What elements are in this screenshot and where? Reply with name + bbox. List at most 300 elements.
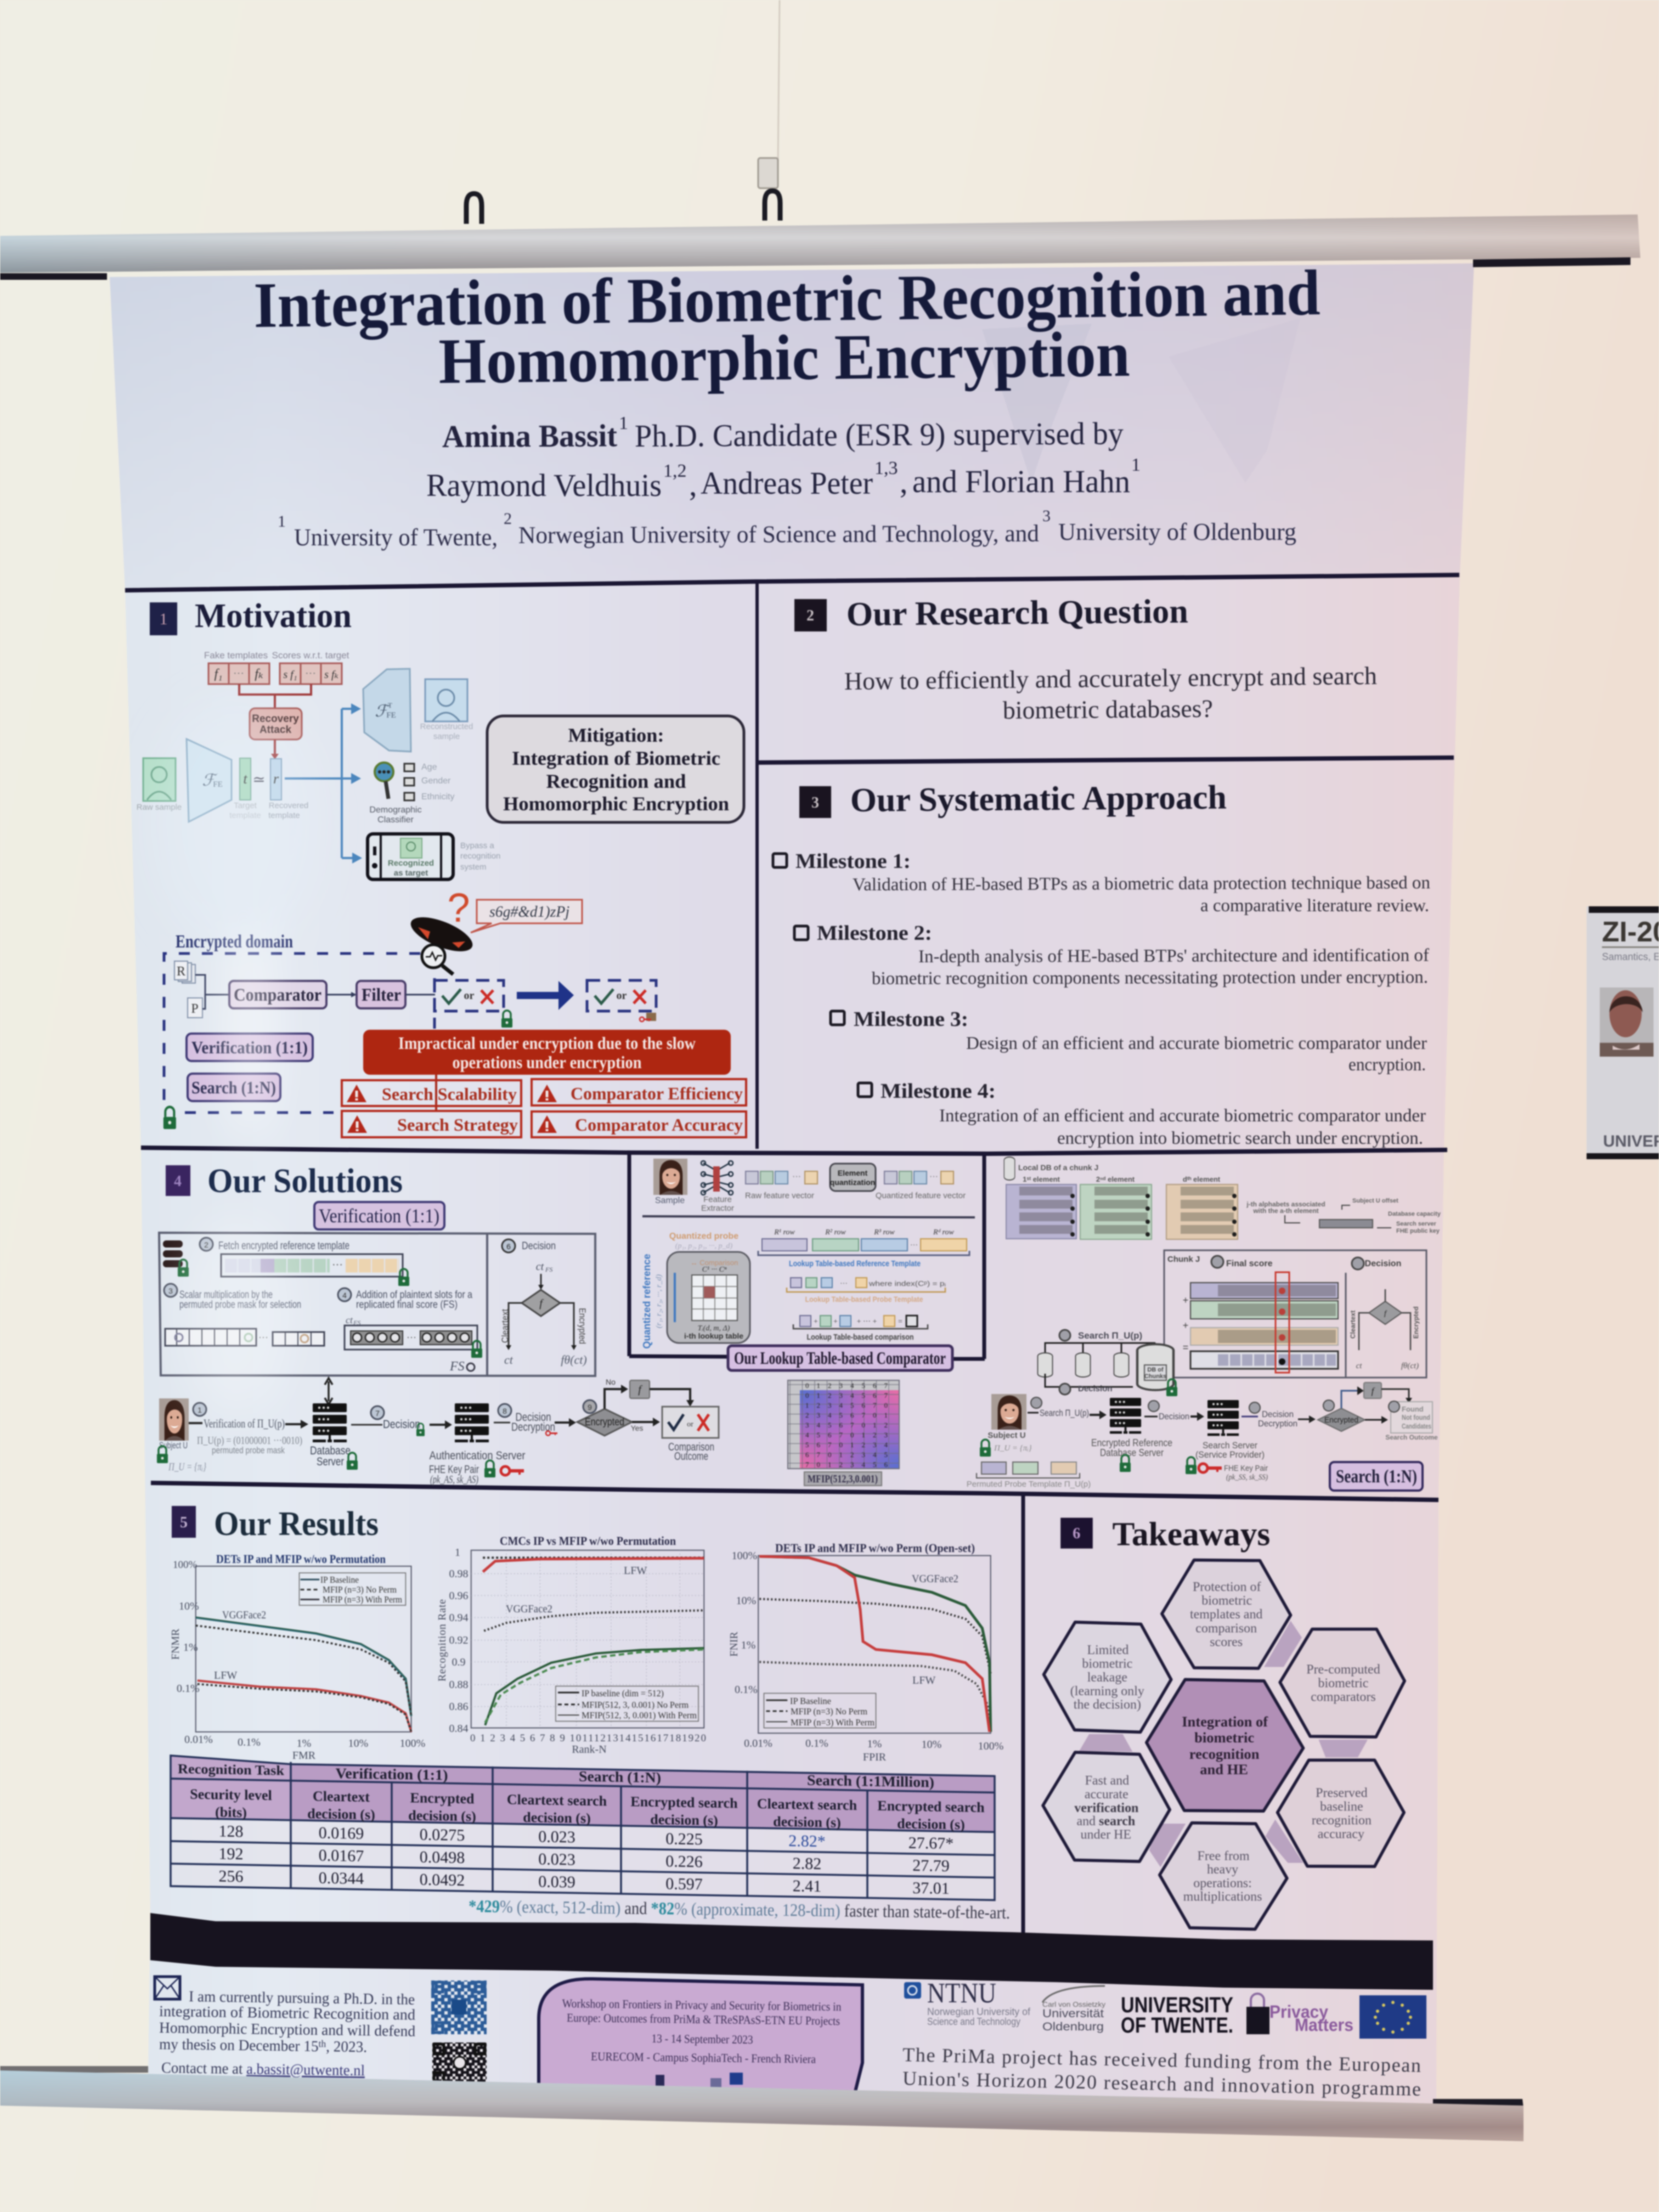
table row: 256 bits: 0.0492 — [420, 1871, 465, 1889]
recovery attack diagram: ℱ — [375, 702, 391, 720]
milestone 3: Milestone 3: — [854, 1008, 968, 1031]
search server: (Service Provider) — [1195, 1449, 1265, 1460]
panel: motivation — [137, 597, 746, 1137]
chart: DET open-set: DETs IP and MFIP w/wo Perm (Open-set) — [775, 1541, 975, 1555]
takeaway labels: multiplications — [1183, 1889, 1262, 1904]
milestone 2 — [794, 922, 1429, 989]
table header row: Search (1:N) — [579, 1768, 661, 1786]
chart: DET open-set: 0.01% — [744, 1737, 772, 1750]
icon: envelope — [155, 1977, 180, 1999]
step 2: fetch template: 2 — [204, 1240, 208, 1249]
chart: DET open-set: 100% — [732, 1550, 757, 1562]
element explanation diagram — [1246, 1198, 1441, 1234]
challenge: search strategy: Search Strategy — [397, 1115, 518, 1135]
hexagon: pre-computed comparators — [1280, 1629, 1404, 1737]
authors: 1 — [619, 413, 628, 433]
lookup table-based reference template: R¹ row — [774, 1228, 795, 1237]
decision to authentication server — [351, 1406, 452, 1436]
recovery attack diagram: system — [460, 862, 487, 872]
chart: DET open-set — [728, 1541, 1003, 1763]
chart: DET open-set: 0.1% — [735, 1684, 758, 1696]
chunks database: Chunks — [1144, 1373, 1166, 1380]
table header row: decision (s) — [650, 1812, 718, 1829]
takeaway labels: accuracy — [1318, 1827, 1364, 1842]
chunk J panel: + — [1183, 1295, 1188, 1306]
chunk J panel: f — [1384, 1310, 1387, 1318]
heading: our solutions: Our Solutions — [207, 1163, 403, 1200]
takeaway labels: Preserved — [1316, 1786, 1368, 1801]
label: verification request — [189, 1417, 308, 1455]
logo: University of Oldenburg: Universität — [1042, 2007, 1104, 2020]
quantized feature vector: Quantized feature vector — [876, 1191, 966, 1200]
decision decryption in search: Decision — [1262, 1410, 1294, 1419]
chunk J panel: + — [1183, 1320, 1188, 1331]
logo: NTNU: NTNU — [927, 1978, 996, 2009]
funding acknowledgment: The PriMa project has received funding from the European — [902, 2044, 1421, 2076]
logo: University of Twente: OF TWENTE. — [1121, 2013, 1233, 2038]
chart: DET verification — [170, 1552, 425, 1762]
portrait photo on sign — [1600, 988, 1654, 1057]
takeaway labels: Fast and — [1085, 1774, 1129, 1788]
takeaway labels: scores — [1210, 1635, 1243, 1650]
chart: DET verification: 10% — [348, 1737, 368, 1750]
takeaway labels: Limited — [1087, 1643, 1128, 1657]
decision decryption step: Decision — [516, 1411, 551, 1424]
decision box decrypted — [587, 980, 656, 1022]
search outcome — [1385, 1401, 1438, 1441]
chart: DET open-set: 100% — [978, 1740, 1003, 1752]
recovery attack diagram: Ethnicity — [421, 792, 454, 802]
chart: DET verification: 10% — [179, 1600, 199, 1612]
authors: 1,3 — [874, 458, 898, 478]
table header row: decision (s) — [307, 1805, 375, 1822]
chunk J panel — [1164, 1250, 1426, 1378]
heatmap: MFIP table: 23456701 — [805, 1411, 895, 1419]
workshop box: EURECOM - Campus SophiaTech - French Riviera — [591, 2049, 816, 2066]
takeaway labels: heavy — [1207, 1863, 1238, 1877]
logo: University of Oldenburg — [1042, 1986, 1106, 2033]
raw feature vector: ··· — [792, 1172, 801, 1182]
recovery attack diagram — [137, 650, 500, 879]
search server: FHE Key Pair — [1224, 1464, 1268, 1473]
contact text: th — [318, 2038, 326, 2049]
element explanation diagram: Database capacity — [1388, 1211, 1441, 1217]
chart: CMC identification: VGGFace2 — [506, 1603, 552, 1615]
comparator box — [229, 981, 326, 1008]
chart: DET verification: 1% — [297, 1737, 311, 1750]
takeaway labels: Free from — [1198, 1849, 1250, 1864]
chart: DET open-set: FPIR — [863, 1751, 887, 1763]
table row: 256 bits: 0.0344 — [319, 1869, 364, 1888]
step 6: decision: ct — [504, 1353, 514, 1367]
milestone 3 — [831, 1008, 1427, 1075]
search outcome: Not found — [1402, 1413, 1430, 1421]
heatmap: MFIP table: 45670123 — [805, 1431, 895, 1439]
section frame lines — [125, 575, 1459, 1934]
chart: CMC identification: 1 — [455, 1547, 460, 1559]
recovery attack diagram: f₁ — [214, 667, 223, 681]
decision decryption in search: Decryption — [1258, 1419, 1297, 1429]
chunk J panel: Chunk J — [1167, 1255, 1200, 1264]
local database of a chunk: 2ⁿᵈ element — [1096, 1175, 1135, 1183]
tag: search — [188, 1074, 280, 1101]
chunk J panel: fθ(ct) — [1401, 1362, 1419, 1370]
chunk J panel: ct — [1356, 1362, 1362, 1370]
recovery attack diagram: ··· — [233, 668, 244, 680]
search request arrow — [1028, 1397, 1107, 1419]
heatmap: MFIP table: MFIP(512,3,0.001) — [808, 1473, 878, 1485]
heatmap: MFIP table: 01234567 — [805, 1381, 895, 1390]
heading: motivation: 1 — [159, 610, 168, 628]
heatmap: MFIP table: 34567012 — [805, 1421, 895, 1429]
lookup table grid — [641, 1232, 750, 1349]
chart: DET verification: 0.01% — [184, 1734, 213, 1746]
lookup table-based comparison — [793, 1316, 928, 1342]
recovery attack diagram: template — [268, 811, 300, 820]
table header row: (bits) — [215, 1804, 247, 1820]
authentication server: FHE Key Pair — [429, 1464, 479, 1476]
database server: Database — [310, 1444, 351, 1457]
takeaway labels: Pre-computed — [1306, 1663, 1380, 1677]
attacker icon with speech bubble: ? — [447, 885, 470, 930]
challenge boxes — [342, 1079, 746, 1137]
lookup table-based comparison: + ··· + — [857, 1318, 877, 1326]
step 6: decision: Encrypted — [577, 1308, 588, 1344]
decision to authentication server: Decision — [383, 1418, 420, 1431]
step 4: addition of plaintext slots: 4 — [342, 1291, 347, 1300]
raw feature vector: Raw feature vector — [745, 1191, 814, 1200]
panel: search 1:N workflow — [967, 1157, 1441, 1491]
takeaway labels: biometric — [1201, 1594, 1252, 1608]
affiliations — [278, 507, 1296, 551]
lookup table-based reference template: R² row — [825, 1228, 846, 1237]
tag: verification: Verification (1:1) — [191, 1037, 308, 1057]
takeaway labels: leakage — [1087, 1671, 1127, 1685]
comparison outcome: Comparison — [668, 1441, 714, 1453]
lookup table-based comparison: = — [898, 1318, 902, 1326]
authentication server: (pk_AS, sk_AS) — [430, 1474, 478, 1486]
hexagon: fast and accurate — [1043, 1752, 1170, 1861]
milestone 4: encryption into biometric search under encryption. — [1057, 1128, 1423, 1148]
heading: our results: Our Results — [214, 1505, 379, 1543]
encrypted decision diamond: f — [638, 1384, 642, 1396]
database server: Server — [317, 1455, 344, 1468]
affiliations: Norwegian University of Science and Technology, and — [518, 520, 1039, 549]
sample photo — [653, 1159, 687, 1205]
heading: our solutions: 4 — [174, 1173, 182, 1190]
decision box encrypted: or — [464, 990, 475, 1002]
chart: DET verification: MFIP (n=3) With Perm — [323, 1594, 402, 1605]
takeaway labels: the decision) — [1074, 1697, 1141, 1712]
chart: DET verification: 100% — [400, 1737, 425, 1750]
takeaway labels: biometric — [1194, 1729, 1254, 1746]
chart: DET open-set: 1% — [867, 1738, 882, 1750]
table header row: Security level — [190, 1786, 272, 1803]
table row: 128 bits: 0.0275 — [420, 1826, 465, 1844]
step 6: decision: Decision — [522, 1240, 556, 1252]
encrypted database icon — [163, 1240, 189, 1277]
raw feature vector — [745, 1171, 817, 1200]
bottom mounting rod — [0, 2066, 1523, 2141]
takeaway labels: recognition — [1189, 1746, 1260, 1762]
step 3: scalar multiplication: Scalar multiplication by the — [179, 1289, 273, 1301]
chart: DET verification: IP Baseline — [320, 1575, 359, 1585]
chart: DET verification: FMR — [292, 1750, 316, 1762]
logo: Privacy Matters: Matters — [1295, 2015, 1353, 2035]
local database of a chunk — [1004, 1157, 1238, 1239]
search pipeline — [967, 1383, 1438, 1491]
table row: 256 bits: 37.01 — [912, 1879, 950, 1898]
table row: 192 bits: 0.0167 — [319, 1847, 364, 1865]
search outcome: Found — [1402, 1405, 1424, 1413]
callout: mitigation: Integration of Biometric — [512, 747, 720, 769]
chart: DET verification: 100% — [173, 1559, 198, 1571]
search server — [1186, 1400, 1268, 1482]
milestone 2: In-depth analysis of HE-based BTPs' architecture and identification of — [918, 946, 1429, 967]
lookup table grid: ↔ Comparison — [691, 1259, 738, 1267]
recovery attack diagram: fₖ — [255, 667, 263, 681]
step 6: decision: fθ(ct) — [561, 1353, 587, 1367]
heatmap: MFIP table: 56701234 — [805, 1441, 895, 1449]
chart: CMC identification: Rank-N — [572, 1743, 607, 1756]
lookup table-based comparison: + — [814, 1318, 818, 1326]
search request arrow: Search Π_U(p) — [1040, 1408, 1089, 1418]
step 4: addition of plaintext slots: replicated final score (FS) — [356, 1299, 458, 1311]
recovery attack diagram: Gender — [421, 776, 451, 786]
table header row — [178, 1761, 985, 1833]
comparison outcome: Outcome — [674, 1451, 708, 1463]
milestone 1: Milestone 1: — [795, 850, 911, 873]
takeaway labels: under HE — [1081, 1828, 1131, 1842]
milestone 3: encryption. — [1348, 1055, 1426, 1075]
heading: takeaways: 6 — [1073, 1525, 1080, 1542]
table row: 192 bits: 192 — [219, 1844, 243, 1863]
callout: impractical under encryption: Impractical under encryption due to the slow — [398, 1033, 696, 1053]
logo: NTNU — [904, 1978, 1031, 2027]
affiliations: University of Oldenburg — [1058, 518, 1296, 545]
chunk J panel: = — [1183, 1342, 1188, 1353]
lookup table-based comparison: Lookup Table-based comparison — [806, 1333, 914, 1342]
contact text: , 2023. — [326, 2038, 367, 2056]
step 6: decision: FS — [545, 1266, 552, 1273]
chart: DET open-set: MFIP (n=3) With Perm — [791, 1717, 874, 1728]
chart: DET open-set: MFIP (n=3) No Perm — [791, 1706, 867, 1717]
logo: NTNU: Norwegian University of — [927, 2006, 1031, 2017]
recovery attack diagram: Classifier — [377, 815, 414, 825]
authors: Raymond Veldhuis — [426, 467, 662, 503]
recovery attack diagram: template — [229, 811, 261, 820]
table header row: Encrypted search — [630, 1793, 738, 1812]
chart: DET open-set: 10% — [922, 1739, 941, 1751]
authors: 1,2 — [663, 461, 687, 481]
decision to search server — [1144, 1401, 1204, 1421]
table row: 192 bits: 0.0498 — [420, 1848, 465, 1867]
step 3: scalar multiplication: 3 — [168, 1286, 173, 1295]
heading: research question: 2 — [806, 607, 814, 624]
chart: CMC identification: 0.88 — [449, 1679, 469, 1691]
table header row: decision (s) — [897, 1815, 965, 1833]
feature extractor icon — [701, 1161, 734, 1213]
heading: takeaways: Takeaways — [1113, 1516, 1270, 1553]
workshop box: Workshop on Frontiers in Privacy and Security for Biometrics in — [562, 1996, 842, 2013]
hexagon: integration center — [1147, 1679, 1304, 1811]
recovery attack diagram: FE — [386, 711, 396, 720]
takeaway labels: biometric — [1318, 1677, 1368, 1691]
panel: takeaways — [1043, 1516, 1404, 1929]
database server — [310, 1403, 358, 1470]
table header row: Encrypted — [410, 1790, 475, 1807]
milestone 1: a comparative literature review. — [1200, 896, 1429, 916]
step 2: fetch template: ··· — [332, 1259, 343, 1271]
title — [253, 257, 1321, 397]
recovery attack diagram: sample — [433, 732, 460, 741]
table header row: decision (s) — [523, 1809, 591, 1826]
encrypted decision diamond: Encrypted — [585, 1417, 624, 1428]
milestone 4: Milestone 4: — [881, 1080, 996, 1103]
table row: 192 bits: 2.82 — [793, 1854, 821, 1873]
chunks database: Search Π_U(p) — [1078, 1330, 1142, 1341]
table row: 192 bits: 0.023 — [538, 1850, 575, 1869]
takeaway labels: recognition — [1312, 1814, 1372, 1828]
recovery attack diagram: ≃ — [252, 771, 266, 788]
heading: systematic approach: Our Systematic Approach — [850, 779, 1227, 819]
subject U in search: Subject U — [988, 1431, 1026, 1440]
table row: 192 bits: 0.226 — [665, 1852, 703, 1871]
challenge: comparator accuracy — [532, 1111, 746, 1137]
element quantization box: quantization — [830, 1178, 875, 1187]
chart: CMC identification: 0.96 — [449, 1590, 469, 1602]
title: Integration of Biometric Recognition and — [253, 257, 1321, 341]
table row: 256 bits: 2.41 — [793, 1877, 821, 1895]
chart: CMC identification: CMCs IP vs MFIP w/wo Permutation — [500, 1534, 676, 1548]
footnote: speed improvement: *429% (exact, 512-dim) and *82% (approximate, 128-dim) faster than state-of-the-art. — [469, 1896, 1010, 1922]
local database of a chunk: Local DB of a chunk J — [1018, 1163, 1098, 1172]
authentication server — [429, 1403, 526, 1486]
chunk J panel: Final score — [1226, 1259, 1273, 1268]
quantized feature vector: ··· — [929, 1172, 938, 1182]
step 6: decision — [500, 1239, 588, 1367]
takeaway labels: verification — [1074, 1801, 1138, 1815]
takeaway labels — [1070, 1580, 1380, 1904]
local database of a chunk: dᵗʰ element — [1183, 1175, 1221, 1183]
recovery attack diagram: recognition — [460, 851, 500, 861]
step 3: scalar multiplication: permuted probe mask for selection — [179, 1299, 301, 1311]
recovery attack diagram: Age — [421, 763, 437, 772]
chart: DET verification: LFW — [214, 1669, 237, 1681]
tag: our lookup table-based comparator — [728, 1346, 952, 1370]
heading: systematic approach: 3 — [811, 794, 819, 811]
lookup table-based comparison: + — [833, 1318, 838, 1326]
sample photo: Sample — [655, 1196, 685, 1205]
chart: CMC identification: 0.98 — [449, 1568, 469, 1580]
hexagon: protection — [1162, 1560, 1291, 1668]
encrypted decision diamond: No — [606, 1378, 616, 1386]
milestone 2: biometric recognition components necessitating protection under encryption. — [872, 967, 1428, 989]
takeaway labels: baseline — [1320, 1800, 1363, 1814]
chart: CMC identification: LFW — [624, 1565, 647, 1577]
milestone 3: Design of an efficient and accurate biometric comparator under — [966, 1034, 1427, 1053]
table header row: Encrypted search — [877, 1798, 985, 1815]
table header row: Cleartext — [313, 1788, 370, 1805]
recovery attack diagram: ··· — [305, 668, 316, 680]
comparator box: Comparator — [234, 985, 321, 1005]
chart: DET open-set: 10% — [736, 1595, 756, 1607]
lookup table-based probe template — [787, 1278, 946, 1304]
tag: verification — [187, 1034, 313, 1061]
callout: mitigation: Homomorphic Encryption — [503, 793, 729, 815]
label: verification request: Π_U(p) = (01000001 ···0010) — [197, 1435, 302, 1447]
door name sign at right — [1587, 906, 1659, 1159]
milestone 1 — [773, 850, 1430, 916]
recovery attack diagram: Recognized — [388, 859, 434, 868]
milestone 1: Validation of HE-based BTPs as a biometric data protection technique based on — [853, 873, 1430, 895]
chart: CMC identification: 0.9 — [452, 1656, 465, 1668]
label: verification request: Verification of Π_U(p) — [204, 1417, 285, 1430]
chart: CMC identification: MFIP(512, 3, 0.001) No Perm — [582, 1700, 689, 1710]
poster sheet — [110, 263, 1474, 2107]
attacker icon with speech bubble — [407, 885, 582, 974]
chart: CMC identification: 0.86 — [449, 1701, 469, 1713]
heatmap: MFIP table: 67012345 — [805, 1451, 895, 1459]
takeaway labels: operations: — [1193, 1876, 1252, 1891]
panel: our results — [170, 1505, 1010, 1922]
recovery attack diagram: s fₖ — [324, 669, 338, 681]
recovery attack diagram: Scores w.r.t. target — [272, 650, 349, 661]
comparison outcome — [662, 1407, 719, 1463]
recovery attack diagram: Fake templates — [204, 650, 268, 661]
tag: search: Search (1:N) — [191, 1077, 276, 1097]
search outcome: Candidates — [1402, 1422, 1431, 1430]
step 2: fetch template — [200, 1238, 409, 1286]
milestone 4 — [858, 1080, 1426, 1148]
table row: 256 bits: 0.597 — [665, 1875, 703, 1893]
lookup table-based reference template: Lookup Table-based Reference Template — [789, 1259, 921, 1268]
chart: CMC identification: 0.94 — [449, 1612, 469, 1624]
chart: DET open-set: FNIR — [728, 1632, 740, 1657]
heatmap: MFIP table: 12345670 — [805, 1401, 895, 1409]
table row: 128 bits: 128 — [219, 1822, 243, 1841]
affiliations: 3 — [1042, 507, 1051, 525]
encrypted decision diamond: Yes — [631, 1424, 643, 1432]
contact text: integration of Biometric Recognition and — [159, 2003, 415, 2024]
step 4: addition of plaintext slots: ct — [346, 1314, 353, 1325]
step 2: fetch template: Fetch encrypted reference template — [218, 1240, 349, 1252]
encrypted reference database server — [1091, 1398, 1172, 1472]
table row: 128 bits: 0.225 — [665, 1830, 703, 1848]
lookup table grid: i-th lookup table — [684, 1331, 743, 1340]
encrypted domain flow: R — [177, 964, 185, 979]
table header row: Cleartext search — [757, 1796, 857, 1813]
table row: 128 bits: 2.82* — [788, 1832, 826, 1850]
callout: mitigation — [487, 716, 744, 822]
element explanation diagram: FHE public key — [1396, 1228, 1440, 1234]
subject U — [157, 1398, 206, 1473]
chunk J panel: Cleartext — [1349, 1311, 1357, 1339]
chart: DET verification: 0.1% — [238, 1736, 261, 1748]
takeaway labels: comparators — [1311, 1690, 1376, 1705]
tag: verification 1:1: Verification (1:1) — [319, 1205, 439, 1227]
challenge: search strategy — [342, 1111, 521, 1137]
heatmap: MFIP table — [788, 1380, 899, 1486]
research question text: biometric databases? — [1003, 695, 1213, 724]
workshop box: Europe: Outcomes from PriMa & TReSPAsS-ETN EU Projects — [567, 2011, 840, 2028]
verification workflow panel — [159, 1233, 595, 1376]
step 3: scalar multiplication: ··· — [258, 1332, 268, 1343]
panel: research question — [794, 593, 1377, 724]
chunks database: DB of — [1147, 1367, 1164, 1373]
takeaway labels: comparison — [1195, 1622, 1257, 1636]
chart: DET open-set: 1% — [741, 1639, 755, 1651]
